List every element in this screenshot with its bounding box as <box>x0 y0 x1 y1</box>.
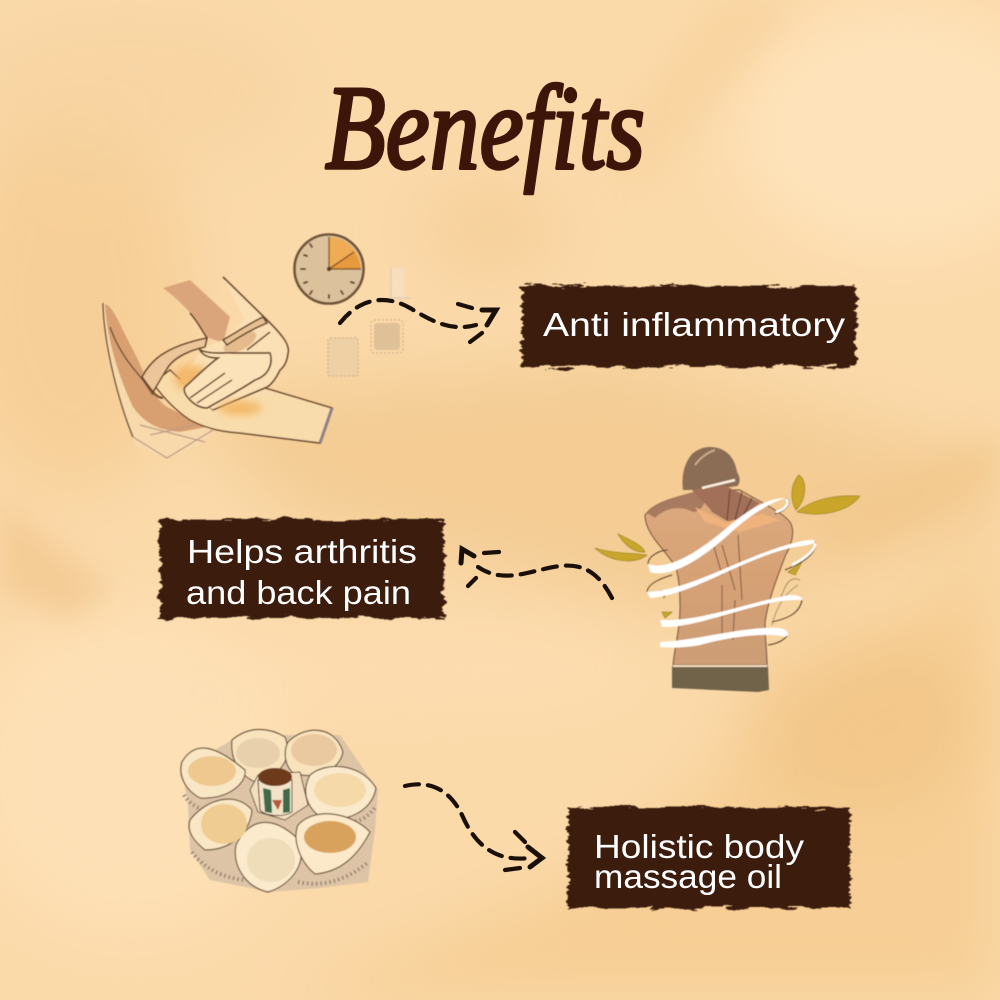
label: Anti inflammatory: Anti inflammatory <box>543 306 846 343</box>
label: Helps arthritis and back pain <box>160 519 444 618</box>
label: Holistic body massage oil: Holistic body <box>594 828 805 865</box>
icon: clock <box>294 234 364 304</box>
panel: holistic body massage oil item <box>181 730 850 908</box>
illustration: back with ribbons and leaves <box>595 447 860 692</box>
sack shadows <box>182 735 378 892</box>
panel: arthritis and back pain item <box>160 447 860 692</box>
label: Anti inflammatory <box>522 286 856 367</box>
arrow <box>405 784 542 870</box>
icon: oil jar <box>250 768 308 820</box>
back figure <box>682 447 740 490</box>
label: Helps arthritis and back pain: Helps arthritis <box>187 533 417 570</box>
arrow <box>461 549 612 598</box>
illustration: sacks of herbs with oil jar <box>181 730 378 892</box>
orange glow <box>174 365 210 391</box>
icon: white ribbons <box>647 498 815 648</box>
hand <box>184 350 271 408</box>
label: Holistic body massage oil <box>568 807 850 908</box>
label: Helps arthritis and back pain: and back pain <box>186 574 411 611</box>
icon: arm with hand on elbow <box>103 277 332 458</box>
label: Holistic body massage oil: massage oil <box>594 858 782 895</box>
forearm sleeve lower <box>153 370 332 443</box>
sack contents <box>188 734 366 882</box>
icon: leaves <box>595 475 860 618</box>
sacks <box>181 730 376 892</box>
arms over neck <box>647 490 704 518</box>
upper sleeve wash <box>163 280 230 343</box>
cuff bands <box>142 338 207 392</box>
title: Benefits <box>325 61 645 194</box>
upper arm <box>180 277 288 410</box>
cloth drape <box>103 303 213 458</box>
panel: anti inflammatory item <box>103 234 856 458</box>
icon: skin patches <box>328 268 411 376</box>
arrow <box>340 300 496 342</box>
